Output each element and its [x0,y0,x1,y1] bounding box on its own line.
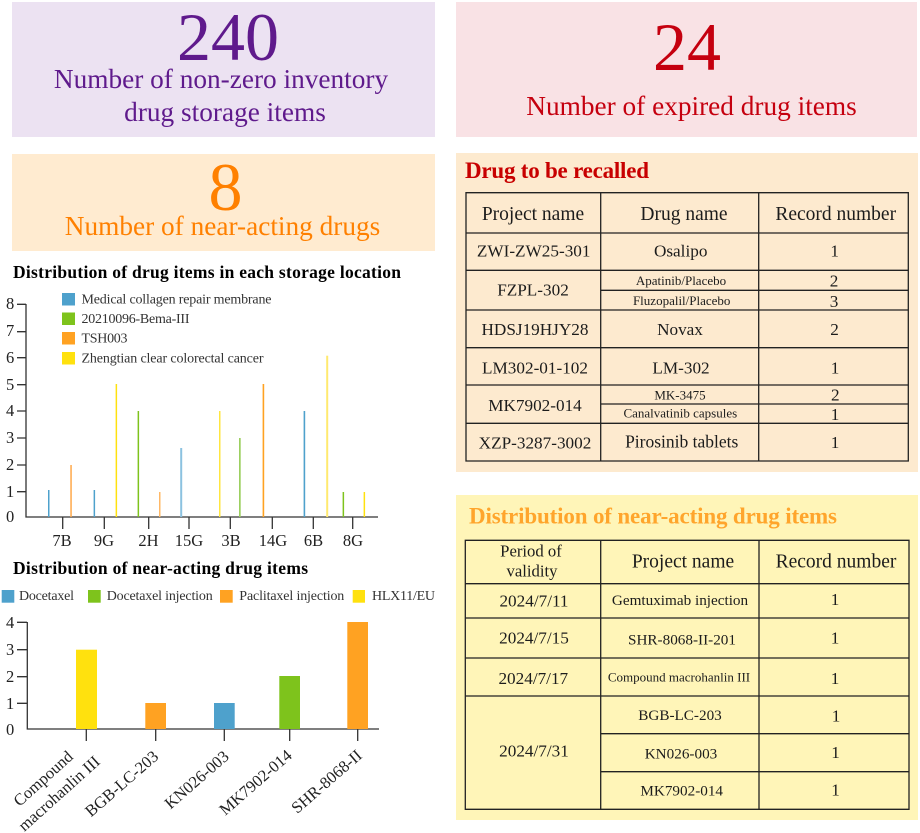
x axis categories: 15G [175,531,203,550]
heading: near-acting chart: Distribution of near-acting drug items [13,558,308,578]
x axis categories: macrohanlin III [14,752,104,833]
x axis categories: MK7902-014 [215,746,296,819]
legend: Docetaxel [19,589,74,604]
x axis categories: 8G [343,531,363,550]
table: near-acting items: 2024/7/31 [499,742,569,761]
table: near-acting items: Period of [500,542,562,561]
panel: non-zero inventory items [12,0,435,137]
table: near-acting items: 1 [832,707,840,726]
legend: HLX11/EU [372,589,435,604]
y axis: 0 [6,507,14,526]
y axis: 0 [6,720,14,739]
table: near-acting items: Project name [632,552,734,573]
x axis categories [9,729,366,833]
y axis: 1 [6,694,14,713]
x axis categories: Compound [9,746,77,810]
panel: near-acting drug items table [456,495,918,820]
x axis categories: 7B [52,531,72,550]
table: recalled drugs: 1 [831,358,839,377]
y axis: 3 [6,640,14,659]
x axis categories: KN026-003 [161,747,233,813]
table: near-acting items: Gemtuximab injection [612,592,749,609]
table: recalled drugs: XZP-3287-3002 [479,433,591,452]
table: near-acting items: MK7902-014 [640,783,723,800]
legend [2,589,435,604]
y axis: 2 [6,455,14,474]
x axis categories: BGB-LC-203 [81,747,162,821]
table: near-acting items: 2024/7/11 [499,592,569,611]
table: recalled drugs: 2 [830,272,838,291]
table: recalled drugs: Drug name [640,204,728,225]
stat: 240: 240 [177,0,279,75]
bars [48,356,365,517]
table: near-acting items: 1 [831,743,840,762]
table: near-acting items: Record number [776,552,897,573]
chart: near-acting items by project [2,589,435,833]
legend: Docetaxel injection [107,589,213,604]
table: recalled drugs: 1 [831,433,839,452]
legend: TSH003 [82,332,128,347]
table: recalled drugs: 2 [831,386,840,405]
table: recalled drugs: 1 [831,405,839,424]
table: near-acting items: Compound macrohanlin III [608,670,750,685]
panel: near-acting drugs [12,149,435,251]
table: near-acting items: SHR-8068-II-201 [628,632,736,649]
stat: 24: 24 [653,9,721,85]
y axis: 7 [6,321,14,340]
legend [62,292,272,367]
legend: 20210096-Bema-III [82,312,190,327]
panel: expired items [456,2,917,137]
stat label: near-acting: Number of near-acting drugs [65,211,380,241]
legend: Paclitaxel injection [239,589,344,604]
x axis categories: 6B [304,531,323,550]
table: recalled drugs: Apatinib/Placebo [636,273,726,288]
table: recalled drugs: Project name [482,204,584,225]
x axis categories: 3B [221,531,241,550]
table: near-acting items: 1 [831,629,839,648]
y axis: 3 [6,428,14,447]
y axis: 1 [6,482,14,501]
x axis categories: SHR-8068-II [287,746,366,817]
table: recalled drugs: LM-302 [652,358,710,377]
table: recalled drugs: MK7902-014 [488,396,582,415]
table: recalled drugs [466,193,908,461]
table: recalled drugs: MK-3475 [654,387,706,402]
table: recalled drugs: LM302-01-102 [482,358,588,377]
table: recalled drugs: Fluzopalil/Placebo [633,293,730,308]
table: recalled drugs: Novax [657,320,703,339]
table: recalled drugs: HDSJ19HJY28 [482,320,588,339]
stat label: non-zero inventory: drug storage items [124,97,326,127]
heading: recalled: Drug to be recalled [465,158,649,183]
table: near-acting items: validity [507,562,558,581]
y axis: 4 [6,613,14,632]
table: near-acting items: 1 [831,590,839,609]
table: near-acting items [465,540,909,809]
heading: near-acting table: Distribution of near-acting drug items [469,503,837,528]
table: recalled drugs: Osalipo [654,242,707,261]
stat: 8: 8 [208,149,242,225]
table: recalled drugs: ZWI-ZW25-301 [477,242,590,261]
y axis: 5 [6,375,14,394]
table: near-acting items: 2024/7/15 [499,629,569,648]
y axis: 2 [6,667,14,686]
legend: Medical collagen repair membrane [82,292,272,308]
table: near-acting items: KN026-003 [645,745,717,762]
table: near-acting items: 2024/7/17 [498,669,569,688]
y axis: 6 [6,348,14,367]
table: recalled drugs: FZPL-302 [497,281,569,300]
legend: Zhengtian clear colorectal cancer [82,352,264,367]
stat label: non-zero inventory: Number of non-zero inventory [54,64,388,94]
stat label: expired: Number of expired drug items [526,91,857,121]
x axis categories [52,517,363,550]
table: recalled drugs: Pirosinib tablets [625,431,739,451]
table: recalled drugs: Canalvatinib capsules [623,406,737,421]
x axis categories: 2H [138,531,159,550]
chart: drug items per storage location [6,292,378,550]
y axis: 4 [6,401,14,420]
y axis [6,294,378,526]
heading: storage location chart: Distribution of drug items in each storage location [13,262,401,282]
table: near-acting items: BGB-LC-203 [638,707,722,724]
y axis: 8 [6,294,14,313]
table: near-acting items: 1 [831,781,840,800]
table: recalled drugs: Record number [775,204,897,225]
bars [76,622,368,729]
table: near-acting items: 1 [831,669,839,688]
x axis categories: 14G [259,531,287,550]
table: recalled drugs: 1 [830,242,839,261]
x axis categories: 9G [94,531,114,550]
y axis [6,613,379,739]
table: recalled drugs: 3 [830,292,838,311]
panel: drug to be recalled [456,153,918,472]
table: recalled drugs: 2 [830,320,839,339]
